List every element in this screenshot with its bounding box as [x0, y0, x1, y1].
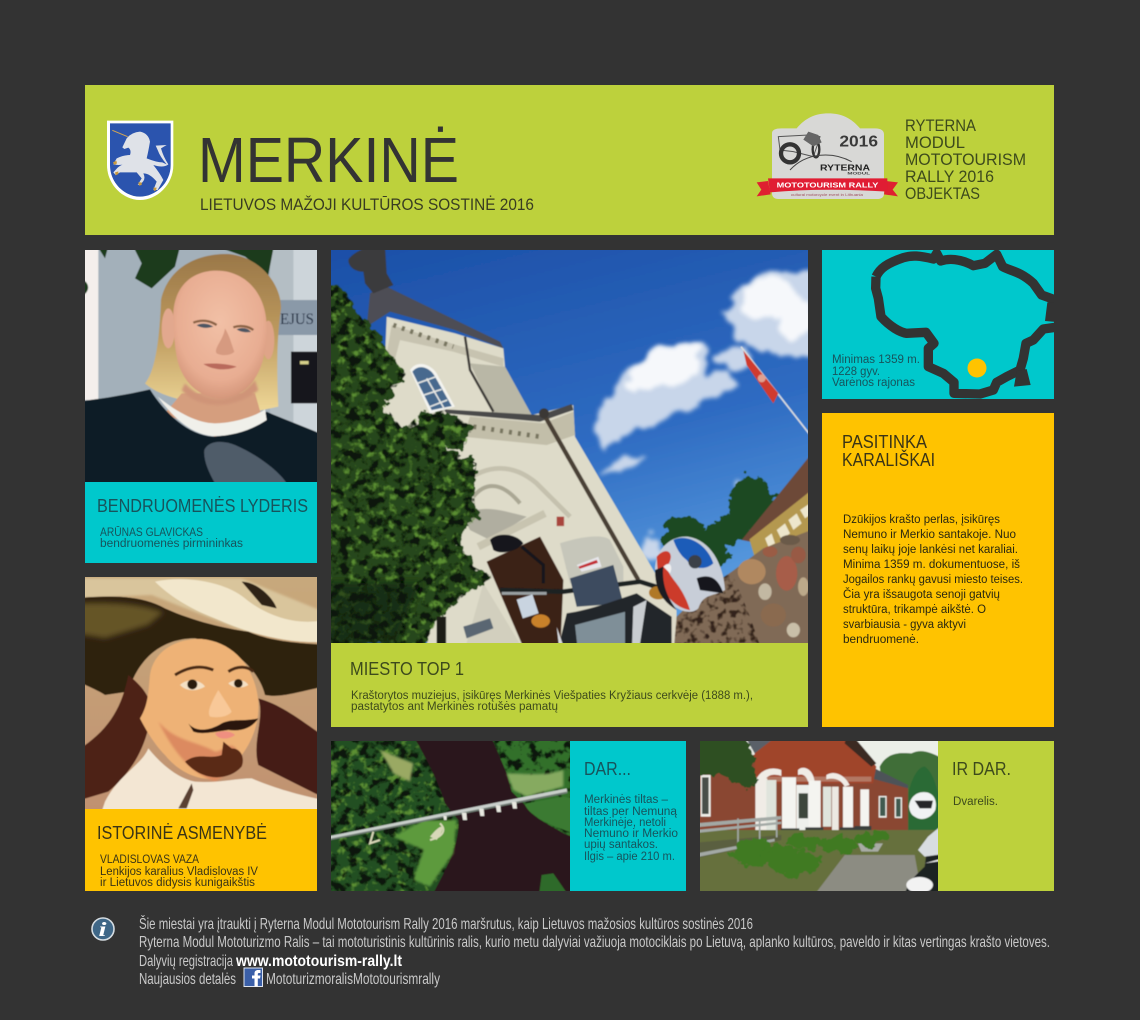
description: Jogailos rankų gavusi miesto teises. [843, 574, 1023, 586]
description: Kraštorytos muziejus, įsikūręs Merkinės Viešpaties Kryžiaus cerkvėje (1888 m.), [351, 690, 753, 702]
photo: Merkinė church museum [320, 240, 820, 655]
footer text: Šie miestai yra įtraukti į Ryterna Modul Mototourism Rally 2016 maršrutus, kaip Lietuvos mažosios kultūros sostinės 2016 [139, 914, 753, 933]
person details: ir Lietuvos didysis kunigaikštis [100, 877, 255, 889]
description: Dzūkijos krašto perlas, įsikūręs [843, 514, 1000, 526]
motorcycle [560, 536, 623, 583]
description: tiltas per Nemuną [584, 806, 678, 818]
description: pastatytos ant Merkinės rotušės pamatų [351, 701, 558, 713]
marker: Merkinė location [968, 358, 986, 378]
clouds [597, 269, 820, 560]
map caption: Minimas 1359 m. [832, 354, 920, 366]
person details: VLADISLOVAS VAZA [100, 854, 199, 866]
panel: community leader [85, 482, 317, 563]
photo: Vladislovas Vaza portrait [85, 577, 317, 809]
rally label text: RYTERNA [905, 116, 977, 135]
footer text: MototurizmoralisMototourismrally [266, 971, 440, 988]
photo: community leader portrait: EJUS [280, 311, 314, 328]
left tree [320, 285, 493, 655]
rally label text [905, 116, 1026, 203]
description: Nemuno ir Merkio santakoje. Nuo [843, 529, 1016, 541]
leader name [100, 527, 243, 550]
heading: PASITINKA [842, 432, 927, 452]
description: struktūra, trikampė aikštė. O [843, 604, 986, 616]
map caption [832, 354, 920, 389]
heading: DAR... [584, 759, 631, 779]
panel: map of Lithuania [822, 250, 1060, 399]
logo: rally badge: cultural motorcycle event in Lithuania [791, 193, 864, 197]
icon: information: i [98, 919, 107, 941]
subtitle: LIETUVOS MAŽOJI KULTŪROS SOSTINĖ 2016 [200, 195, 534, 214]
icon: coat of arms [107, 121, 173, 200]
house [742, 457, 808, 542]
heading [842, 432, 935, 470]
panel: more [570, 741, 686, 891]
panel: royal welcome [822, 413, 1054, 727]
footer text: Naujausios detalės [139, 971, 236, 988]
registration link: www.mototourism-rally.lt [235, 953, 403, 970]
icon: facebook [244, 968, 262, 986]
heading: MIESTO TOP 1 [350, 659, 464, 679]
rally label text: OBJEKTAS [905, 184, 980, 203]
description: upių santakos. [584, 839, 658, 851]
panel: header [85, 85, 1054, 235]
description [584, 794, 678, 863]
leader name: ARŪNAS GLAVICKAS [100, 527, 203, 539]
description: senų laikų joje lankėsi net karaliai. [843, 544, 1018, 556]
trees behind wall [662, 475, 775, 570]
description: Minima 1359 m. dokumentuose, iš [843, 559, 1020, 571]
rally label text: MOTOTOURISM [905, 150, 1026, 169]
logo: rally badge: MODUL [847, 170, 871, 175]
map caption: 1228 gyv. [832, 366, 880, 378]
logo: rally badge: RYTERNA [820, 162, 870, 172]
photo: community leader portrait [85, 250, 317, 482]
description: Dvarelis. [953, 796, 998, 808]
rally label text: MODUL [905, 133, 965, 152]
description: Merkinėje, netoli [584, 817, 666, 829]
map caption: Varėnos rajonas [832, 377, 915, 389]
person details: Lenkijos karalius Vladislovas IV [100, 866, 258, 878]
description: Merkinės tiltas – [584, 794, 669, 806]
description [351, 690, 753, 713]
description [843, 514, 1023, 646]
door [487, 537, 563, 655]
heading: ISTORINĖ ASMENYBĖ [97, 823, 267, 843]
map outline [876, 253, 1060, 394]
person details [100, 854, 258, 889]
icon: information [92, 918, 114, 941]
title: MERKINĖ [198, 124, 459, 196]
logo: rally badge [757, 113, 898, 199]
description: svarbiausia - gyva aktyvi [843, 619, 966, 631]
helmet [655, 537, 725, 612]
description: Čia yra išsaugota senoji gatvių [843, 588, 1000, 601]
description: Nemuno ir Merkio [584, 828, 678, 840]
stone wall [674, 531, 808, 643]
heading: KARALIŠKAI [842, 449, 935, 470]
flag [741, 347, 817, 443]
photo: aerial view of Merkinė bridge [331, 741, 570, 891]
footer text [139, 914, 1050, 988]
panel: more still [938, 741, 1054, 891]
leader name: bendruomenės pirmininkas [100, 538, 243, 550]
description: bendruomenė. [843, 634, 919, 646]
photo: manor house [700, 741, 938, 891]
logo: rally badge: MOTOTOURISM RALLY [777, 181, 878, 190]
heading: IR DAR. [952, 759, 1011, 779]
rally label text: RALLY 2016 [905, 167, 994, 186]
logo: rally badge: 2016 [839, 134, 878, 151]
panel: town top 1 [331, 643, 808, 727]
footer text: Dalyvių registracija [139, 953, 233, 970]
building [363, 317, 677, 655]
panel: historic person [85, 809, 317, 891]
description: Ilgis – apie 210 m. [584, 851, 675, 863]
heading: BENDRUOMENĖS LYDERIS [97, 496, 308, 516]
